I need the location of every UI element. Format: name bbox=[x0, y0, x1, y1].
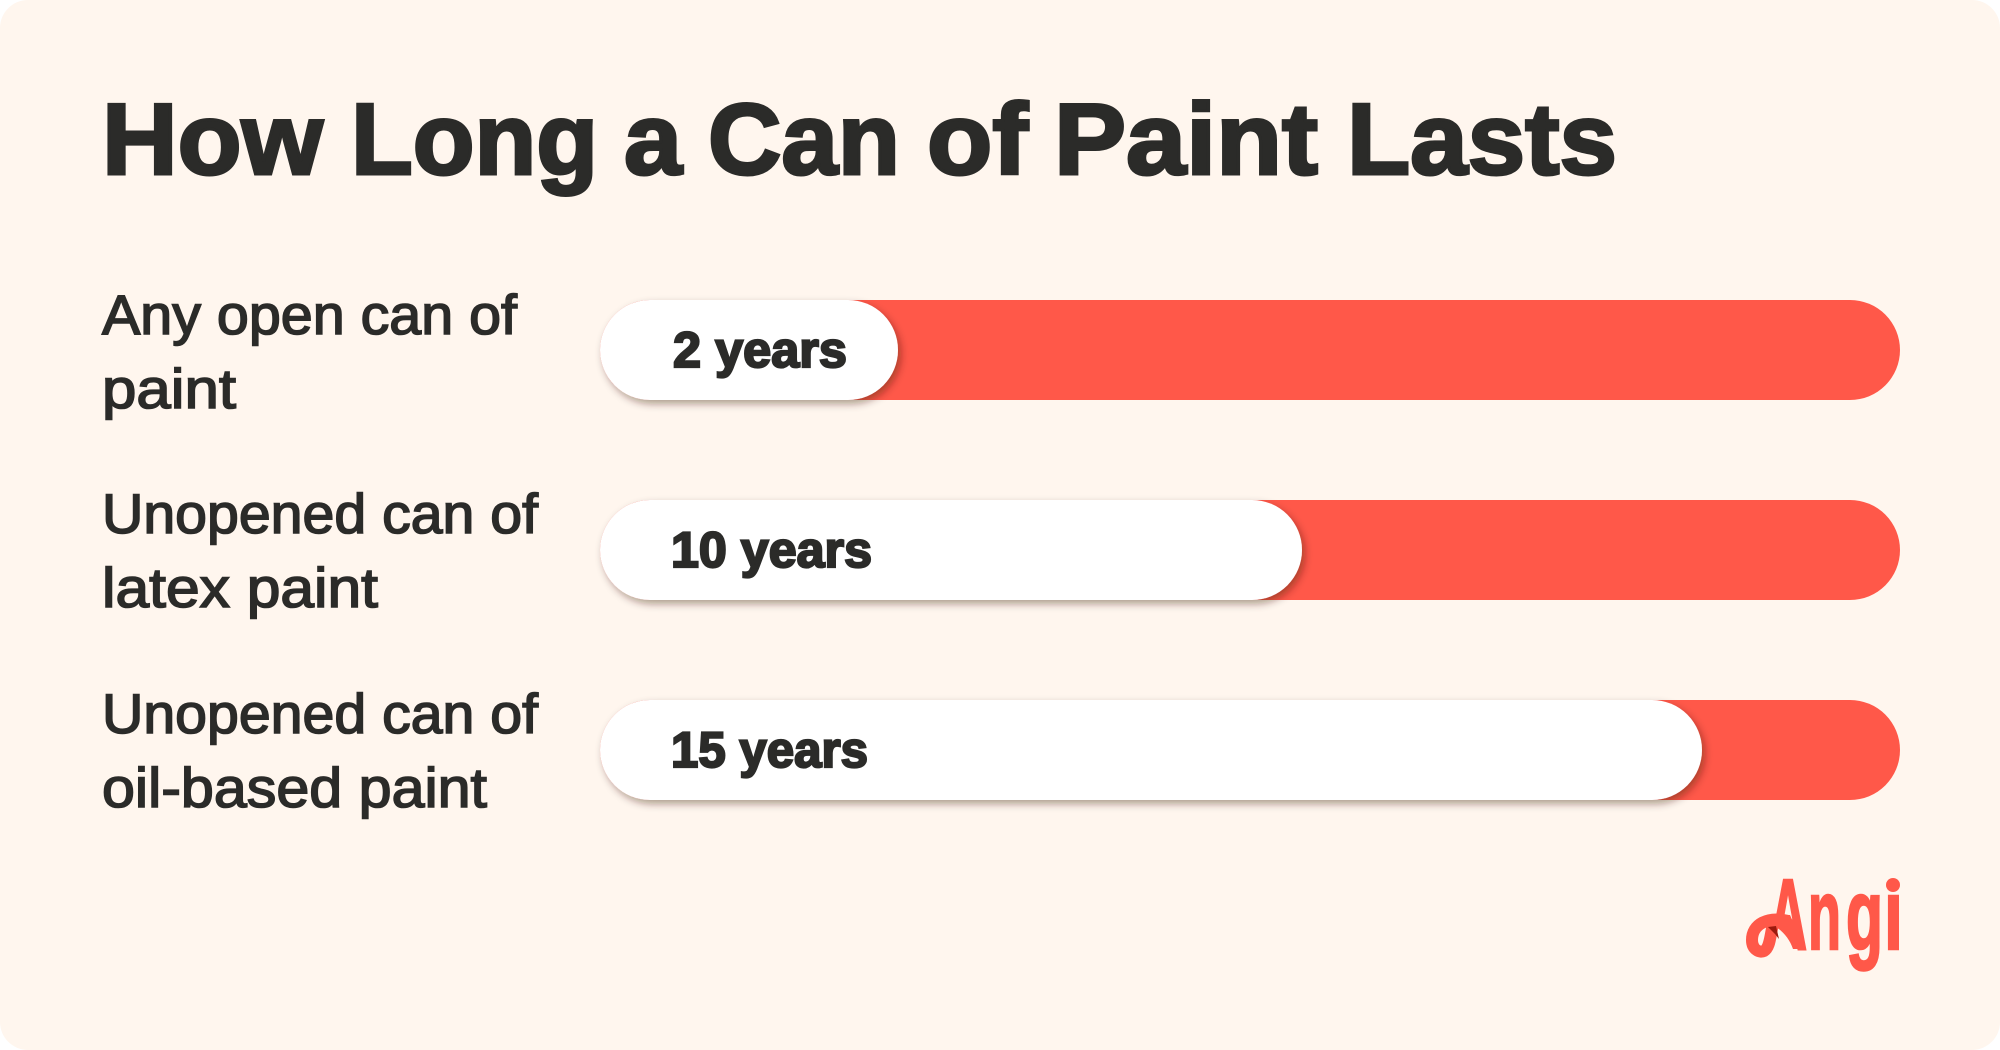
title: How bbox=[102, 84, 323, 196]
label: unopened can of oil-based paint bbox=[102, 682, 538, 819]
logo: Angi: A bbox=[1769, 859, 1807, 971]
title: a bbox=[624, 84, 683, 196]
logo: Angi bbox=[1746, 878, 1900, 972]
value: 2 years: 2 years bbox=[673, 322, 847, 378]
logo: Angi: n bbox=[1808, 859, 1841, 971]
bar fill: 15 years bbox=[600, 700, 1702, 800]
title: Can bbox=[708, 84, 900, 196]
label: unopened can of oil-based paint: oil-based paint bbox=[102, 756, 487, 819]
row: unopened latex paint bbox=[102, 482, 1900, 619]
title: of bbox=[927, 84, 1028, 196]
label: unopened can of latex paint bbox=[102, 482, 538, 619]
label: any open can of paint: Any open can of bbox=[102, 283, 517, 346]
row: any open can of paint bbox=[102, 283, 1900, 420]
title: Paint bbox=[1054, 84, 1318, 196]
value: 10 years: 10 years bbox=[671, 522, 872, 578]
bar track: latex bbox=[600, 500, 1900, 600]
bar fill: 2 years bbox=[600, 300, 898, 400]
title: Long bbox=[351, 84, 598, 196]
label: unopened can of latex paint: Unopened can of bbox=[102, 482, 538, 545]
title bbox=[102, 84, 1617, 196]
label: unopened can of oil-based paint: Unopened can of bbox=[102, 682, 538, 745]
bar track: any open can bbox=[600, 300, 1900, 400]
logo: Angi: g bbox=[1846, 859, 1883, 971]
bar track: oil-based bbox=[600, 700, 1900, 800]
logo: Angi: i bbox=[1884, 859, 1903, 971]
title: Lasts bbox=[1347, 84, 1617, 196]
row: unopened oil-based paint bbox=[102, 682, 1900, 819]
label: any open can of paint: paint bbox=[102, 357, 236, 420]
label: unopened can of latex paint: latex paint bbox=[102, 556, 378, 619]
label: any open can of paint bbox=[102, 283, 517, 420]
value: 15 years: 15 years bbox=[671, 722, 868, 778]
bar fill: 10 years bbox=[600, 500, 1302, 600]
